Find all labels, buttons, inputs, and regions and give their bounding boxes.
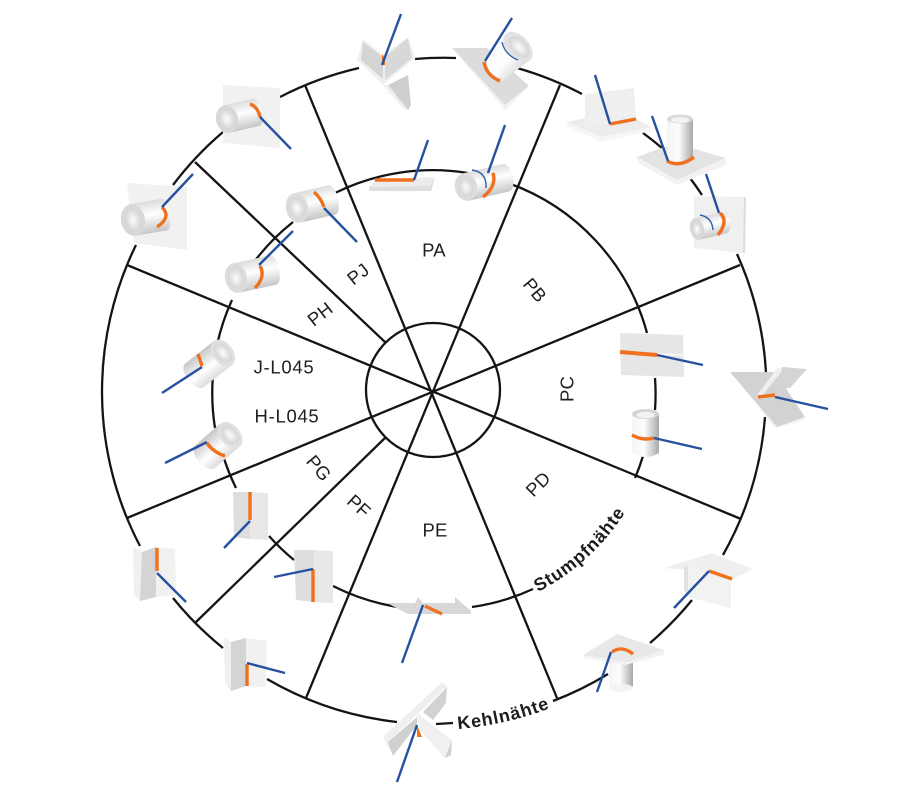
icon: outer PB plate with vertical pipe [637, 114, 726, 185]
icon: outer PJ wall with pipe [213, 85, 291, 149]
outer ring: Kehlnähte [102, 58, 766, 724]
icon: inner PC flat butt plates [620, 333, 703, 377]
icon: outer PF corner [224, 638, 285, 691]
label PH: PH [303, 298, 337, 330]
icon: outer PG corner [133, 547, 186, 602]
label Stumpfnähte: Stumpfnähte [534, 510, 624, 590]
icon: J-L045 inclined pipe [162, 335, 240, 393]
icon: inner PD vertical pipe [632, 409, 702, 457]
label PA: PA [422, 240, 446, 260]
icon: inner PF vertical plates [274, 550, 333, 603]
label Kehlnähte: Kehlnähte [458, 700, 548, 729]
icon: H-L045 inclined pipe [165, 417, 247, 473]
icon: inner PE overhead butt plates [387, 597, 471, 663]
icon: outer PA fillet V [357, 14, 415, 110]
label J-L045: J-L045 [254, 356, 314, 378]
label PJ: PJ [343, 259, 373, 289]
icon: outer PB T joint [567, 75, 651, 142]
icon: outer PE T joint overhead [383, 682, 452, 782]
icon: inner PG vertical plates [224, 492, 268, 548]
label PE: PE [422, 520, 448, 540]
icon: outer PB plate and pipe [452, 18, 538, 110]
icon: outer PB wall with pipe [688, 174, 746, 253]
icon: inner PB pipe [452, 125, 516, 203]
label PC: PC [556, 376, 578, 402]
label PF: PF [343, 490, 375, 522]
hub circle [366, 323, 500, 457]
radial spokes [127, 85, 741, 698]
icon: outer PD overhead plate [664, 553, 753, 608]
icon: inner PH pipe [222, 231, 293, 295]
label PD: PD [521, 467, 555, 501]
label PG: PG [302, 451, 336, 485]
icon: inner PJ pipe [283, 184, 357, 242]
label PB: PB [519, 274, 551, 306]
icon: outer PD overhead plate and pipe [583, 634, 664, 692]
icon: outer PC X joint [730, 367, 828, 428]
icon: outer PH wall with pipe [118, 174, 193, 250]
label H-L045: H-L045 [255, 406, 319, 426]
inner ring: Stumpfnähte [212, 170, 656, 608]
icon: inner PA flat plate [369, 140, 435, 191]
